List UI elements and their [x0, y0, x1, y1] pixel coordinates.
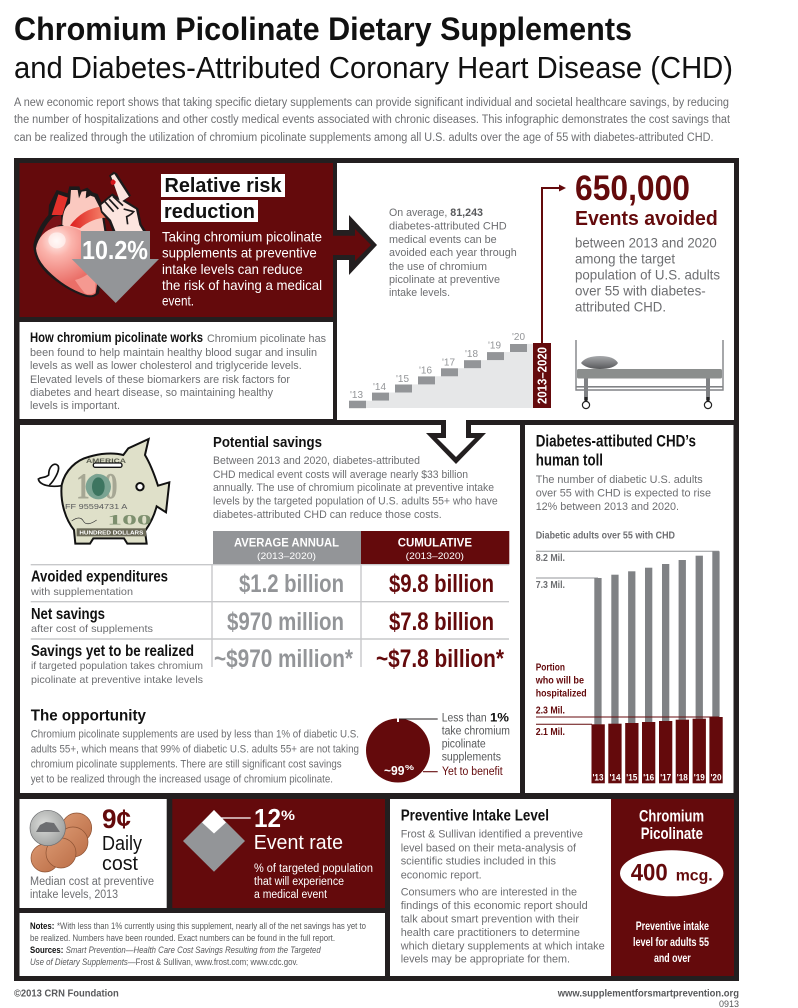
arrow: right [325, 215, 377, 275]
text block: savings description: Between 2013 and 2020, diabetes-attributed [213, 455, 420, 467]
heading: chromium picolinate: Picolinate [641, 825, 703, 843]
row: savings yet to be realized [31, 643, 504, 686]
legend: pie labels: Less than [442, 713, 487, 725]
text block: on average: On average, [389, 207, 447, 219]
text block: on average [389, 207, 517, 299]
table header: average annual: AVERAGE ANNUAL [234, 536, 339, 550]
legend: pie labels: supplements [442, 752, 501, 764]
bar chart: diabetic adults over 55 with CHD: Diabetic adults over 55 with CHD [536, 530, 675, 542]
text block: median cost: Median cost at preventive [30, 876, 154, 888]
text block: preventive intake: Frost & Sullivan identified a preventive [401, 829, 583, 841]
label: daily cost [102, 833, 142, 875]
row: avoided expenditures: $1.2 billion [239, 570, 344, 598]
text block: on average: medical events can be [389, 234, 497, 246]
text block: median cost [30, 876, 154, 901]
panel: how chromium picolinate works: Chromium picolinate has [207, 333, 326, 345]
icon: down arrow 10.2%: 10.2% [82, 235, 148, 265]
legend: pie labels: take chromium [442, 726, 510, 738]
text block: savings description: CHD medical event costs will average nearly $33 billion [213, 469, 468, 481]
panel: daily cost [20, 799, 167, 908]
text block: preventive intake: economic report. [401, 869, 482, 881]
legend: pie labels [442, 711, 510, 778]
text block: on average: the use of chromium [389, 261, 487, 273]
panel: notes: be realized. Numbers have been rounded. Exact numbers can be found in the full report. [30, 933, 335, 943]
text block: median cost: intake levels, 2013 [30, 889, 118, 901]
panel: preventive intake level [390, 799, 611, 976]
bar chart: diabetic adults over 55 with CHD: '19 [694, 772, 705, 783]
big number: 650,000: 650,000 [575, 169, 690, 208]
text block: the opportunity: chromium picolinate supplements. There are still significant cost savings [31, 759, 342, 771]
arrow: down [426, 418, 486, 464]
text block: preventive intake: Consumers who are interested in the [401, 886, 577, 898]
text block: preventive intake: which dietary supplements at which intake [400, 940, 605, 952]
text block: human toll: over 55 with CHD is expected to rise [536, 488, 711, 500]
row: savings yet to be realized: ~$7.8 billion* [376, 645, 504, 673]
panel: notes [20, 913, 385, 976]
heading: Relative risk [164, 175, 282, 197]
table: savings [30, 531, 509, 686]
text block: Taking chromium picolinate [162, 229, 322, 245]
text block: intake levels can reduce [162, 261, 303, 277]
bar chart: diabetic adults over 55 with CHD: '20 [710, 772, 722, 783]
heading: chromium picolinate: Chromium [639, 808, 704, 826]
chart: stairs 2013-2020: 2013–2020 [536, 347, 550, 404]
text block: events description: over 55 with diabetes- [575, 283, 706, 299]
row: savings yet to be realized: ~$970 million* [214, 645, 353, 673]
panel: notes: Smart Prevention—Health Care Cost Savings Resulting from the Targeted [66, 945, 322, 955]
table header: cumulative: CUMULATIVE [398, 536, 472, 550]
big number: 12 percent: % [281, 807, 296, 823]
callout: 400 mcg: mcg. [676, 868, 713, 885]
title: Chromium Picolinate Dietary Supplements [14, 11, 632, 47]
heading [161, 174, 285, 223]
text block: preventive intake: levels may be appropriate for them. [401, 954, 570, 966]
panel: notes: *With less than 1% currently using this supplement, nearly all of the net savings has yet to [57, 921, 366, 931]
footer: website and code: www.supplementforsmartprevention.org [557, 989, 739, 1000]
text block: human toll: 12% between 2013 and 2020. [536, 501, 679, 513]
chart: stairs 2013-2020: '20 [512, 331, 525, 343]
bar chart: diabetic adults over 55 with CHD: '14 [610, 772, 621, 783]
legend: pie labels: 1% [490, 711, 509, 725]
panel: how chromium picolinate works: levels is important. [30, 400, 120, 412]
panel: human toll [525, 425, 734, 793]
table header: cumulative [361, 531, 509, 564]
table header: average annual [213, 531, 361, 564]
big number: 12 percent: 12 [254, 803, 281, 833]
text block: events description [575, 235, 720, 315]
chart: pie 99 percent [366, 718, 438, 782]
table header: average annual: (2013–2020) [257, 551, 316, 562]
text block: preventive intake: talk about smart prevention with their [401, 913, 579, 925]
text block: savings description: diabetes-attributed CHD can reduce those costs. [213, 509, 442, 521]
text block: on average: 81,243 [450, 207, 483, 219]
panel: how chromium picolinate works: levels as well as lower cholesterol and triglyceride levels. [30, 360, 302, 372]
text block: dose description: and over [654, 953, 691, 965]
bar chart: diabetic adults over 55 with CHD: 2.1 Mil. [536, 727, 565, 738]
text block [162, 229, 322, 309]
bar chart: diabetic adults over 55 with CHD: Portion [536, 662, 565, 674]
row: savings yet to be realized: Savings yet to be realized [31, 643, 194, 660]
panel: chromium picolinate dose [611, 799, 734, 976]
icon: hospital bed [576, 340, 723, 409]
bar chart: diabetic adults over 55 with CHD: 8.2 Mil. [536, 553, 565, 564]
panel: how chromium picolinate works: diabetes and heart disease, so maintaining healthy [30, 387, 273, 399]
text block: events description: among the target [575, 251, 675, 267]
text block: savings description [213, 455, 498, 521]
panel: how chromium picolinate works: How chromium picolinate works [30, 330, 203, 345]
text block: the opportunity [31, 729, 359, 786]
icon: down arrow 10.2% [72, 231, 159, 303]
bar chart: diabetic adults over 55 with CHD: '13 [592, 772, 604, 783]
row: avoided expenditures: with supplementation [30, 586, 133, 598]
text block: human toll: The number of diabetic U.S. adults [536, 474, 703, 486]
arrow: years to total [542, 184, 566, 343]
intro text: A new economic report shows that taking specific dietary supplements can provide significant individual and societal healthcare savings, by reducing [14, 97, 729, 109]
text block: the opportunity: Chromium picolinate supplements are used by less than 1% of diabetic U.S. [31, 729, 359, 741]
text block: event rate: % of targeted population [254, 863, 373, 875]
chart: stairs 2013-2020: '13 [350, 389, 363, 401]
row: savings yet to be realized: picolinate at preventive intake levels [31, 674, 203, 686]
row: net savings: Net savings [31, 606, 105, 623]
legend: pie labels: Yet to benefit [442, 766, 503, 778]
panel: notes: Sources: [30, 945, 63, 955]
legend: pie labels: picolinate [442, 739, 486, 751]
text block: on average: intake levels. [389, 287, 450, 299]
row: avoided expenditures [30, 569, 494, 598]
chart: stairs 2013-2020: '17 [442, 356, 455, 368]
chart: pie 99 percent: % [405, 765, 415, 772]
text block: event. [162, 293, 194, 309]
text block: on average: picolinate at preventive [389, 274, 500, 286]
chart: stairs 2013-2020: '18 [465, 348, 478, 360]
text block: the risk of having a medical [162, 277, 322, 293]
bar chart: diabetic adults over 55 with CHD: 2.3 Mil. [536, 705, 565, 716]
icon: piggy bank made of a $100 bill: 100 [76, 465, 118, 506]
icon: piggy bank made of a $100 bill: AMERICA [86, 459, 127, 465]
big number: 12 percent [254, 803, 296, 833]
row: avoided expenditures: Avoided expenditures [31, 569, 168, 586]
text block: event rate: a medical event [254, 889, 328, 901]
footer: website and code [557, 989, 739, 1008]
bar chart: diabetic adults over 55 with CHD: '15 [626, 772, 638, 783]
label: event rate: Event rate [254, 832, 343, 854]
chart: diamond 12 percent [183, 810, 251, 872]
text block: preventive intake [400, 829, 605, 966]
bar chart: diabetic adults over 55 with CHD: who will be [535, 675, 584, 687]
row: net savings [31, 606, 494, 636]
text block: the opportunity: yet to be realized through the increased usage of chromium picolinate. [31, 774, 333, 786]
text block: savings description: levels by the targeted population of U.S. adults 55+ who have [213, 496, 498, 508]
bar chart: diabetic adults over 55 with CHD [535, 530, 723, 783]
chart: stairs 2013-2020: '14 [373, 381, 386, 393]
heading: events avoided: Events avoided [575, 208, 718, 230]
row: avoided expenditures: $9.8 billion [389, 570, 494, 598]
text block: preventive intake: health care practitioners to determine [401, 927, 580, 939]
text block: the opportunity: adults 55+, which means that 99% of diabetic U.S. adults 55+ are not taking [31, 744, 359, 756]
panel: notes: Use of Dietary Supplements—Frost & Sullivan, www.frost.com; www.cdc.gov. [30, 957, 298, 967]
bar chart: diabetic adults over 55 with CHD: '18 [677, 772, 688, 783]
text block: event rate [254, 863, 373, 901]
heading: the opportunity: The opportunity [31, 708, 146, 725]
text block: events description: attributed CHD. [575, 299, 666, 315]
text block: preventive intake: level based on their meta-analysis of [401, 842, 577, 854]
label: daily cost: cost [102, 853, 138, 875]
panel: how chromium picolinate works: Elevated levels of these biomarkers are risk factors for [30, 374, 290, 386]
text block: events description: between 2013 and 2020 [575, 235, 717, 251]
text block: on average: diabetes-attributed CHD [389, 220, 507, 232]
panel: potential savings [20, 425, 520, 793]
intro text: the number of hospitalizations and other costly medical events associated with chronic diseases. This infographic demonstrates the cost savings that [14, 114, 731, 126]
chart: stairs 2013-2020: '16 [419, 364, 432, 376]
intro text: can be realized through the utilization of chromium picolinate supplements among all U.S. adults over the age of 55 with diabetes-attributed CHD. [14, 132, 714, 144]
bar chart: diabetic adults over 55 with CHD: '16 [643, 772, 654, 783]
text block: events description: population of U.S. adults [575, 267, 720, 283]
title: and Diabetes-Attributed Coronary Heart Disease (CHD) [14, 50, 733, 85]
bar chart: diabetic adults over 55 with CHD: 7.3 Mil. [536, 580, 565, 591]
bar chart: diabetic adults over 55 with CHD: '17 [660, 772, 671, 783]
heading: potential savings: Potential savings [213, 434, 322, 451]
icon: coins [30, 810, 92, 872]
heading: human toll: human toll [536, 452, 603, 470]
chart: stairs 2013-2020: '19 [488, 340, 501, 352]
panel: how chromium picolinate works: been found to help maintain healthy blood sugar and insulin [30, 347, 317, 359]
heading: human toll [536, 433, 696, 470]
text block: preventive intake: findings of this economic report should [401, 900, 588, 912]
icon: piggy bank made of a $100 bill: FF 95594731 A [65, 504, 128, 511]
icon: heart with finger prick [33, 172, 148, 297]
panel: relative risk reduction [20, 163, 333, 317]
text block: savings description: annually. The use of chromium picolinate at preventive intake [213, 482, 494, 494]
row: net savings: $7.8 billion [389, 608, 494, 636]
text block: dose description [633, 921, 709, 965]
bar chart: diabetic adults over 55 with CHD: hospitalized [536, 688, 587, 700]
label: daily cost: Daily [102, 833, 142, 855]
callout: 400 mcg [620, 850, 723, 896]
panel: how chromium picolinate works [20, 322, 333, 419]
intro text [14, 97, 731, 144]
text block: dose description: level for adults 55 [633, 937, 709, 949]
panel: events avoided [337, 163, 734, 420]
chart: stairs 2013-2020 [349, 331, 551, 408]
text block: human toll [536, 474, 711, 513]
outer frame [14, 158, 739, 981]
table header: cumulative: (2013–2020) [406, 551, 464, 562]
panel: event rate [172, 799, 385, 908]
heading: preventive intake level: Preventive Intake Level [401, 808, 549, 825]
row: savings yet to be realized: if targeted population takes chromium [31, 660, 203, 672]
icon: piggy bank made of a $100 bill [38, 439, 169, 544]
footer: copyright: ©2013 CRN Foundation [14, 989, 119, 1000]
chart: pie 99 percent: ~99 [384, 763, 404, 778]
icon: piggy bank made of a $100 bill: 100 [107, 512, 152, 528]
text block: on average: avoided each year through [389, 247, 517, 259]
heading: reduction [164, 201, 255, 223]
chart: stairs 2013-2020: '15 [396, 373, 409, 385]
row: net savings: $970 million [227, 608, 344, 636]
icon: piggy bank made of a $100 bill: HUNDRED DOLLARS [79, 531, 144, 537]
heading: chromium picolinate [639, 808, 704, 843]
callout: 400 mcg: 400 [631, 860, 668, 887]
text block: preventive intake: scientific studies included in this [401, 856, 556, 868]
big number: 9 cents: 9¢ [102, 804, 131, 834]
title [14, 11, 733, 85]
heading: human toll: Diabetes-attibuted CHD’s [536, 433, 696, 451]
text block: dose description: Preventive intake [636, 921, 709, 933]
text block: supplements at preventive [162, 245, 317, 261]
text block: event rate: that will experience [254, 876, 344, 888]
row: net savings: after cost of supplements [31, 623, 153, 635]
panel: notes: Notes: [30, 921, 54, 931]
